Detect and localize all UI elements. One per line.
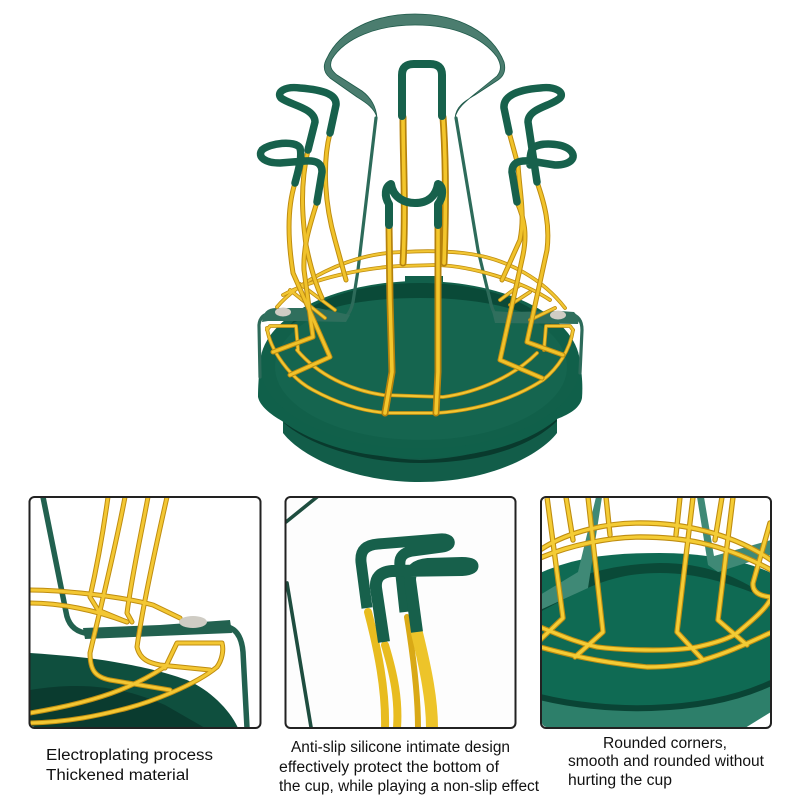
dark frame strip [286,497,317,727]
caption: anti-slip: the cup, while playing a non-slip effect [279,778,540,795]
caption: rounded corners: hurting the cup [568,772,672,789]
caption: rounded corners [568,735,765,789]
product: rotating cup rack [258,14,582,482]
tray base [258,276,582,482]
caption: anti-slip: effectively protect the bottom of [279,759,500,776]
caption: anti-slip: Anti-slip silicone intimate design [291,739,510,756]
panel: anti-slip silicone close-up [286,497,516,728]
panel: rounded corners close-up [540,497,771,728]
green silicone hooks [261,64,573,225]
caption: electroplating [46,747,213,784]
icon: silver screws [275,308,566,320]
caption: electroplating: Electroplating process [46,747,213,764]
caption: rounded corners: Rounded corners, [603,735,727,752]
gold uprights [273,117,563,413]
gold legs close-up [368,612,432,728]
tray close-up [540,553,771,728]
icon: screw close-up [179,616,207,628]
caption: electroplating: Thickened material [46,767,189,784]
tray close-up [30,653,238,728]
strap close-up [540,497,771,610]
gold wires close-up [540,497,771,667]
handle frame and brackets [259,14,582,377]
caption: rounded corners: smooth and rounded without [568,753,765,770]
gold wires close-up [30,497,223,723]
green hooks close-up [361,539,472,642]
gold ring frame [267,251,573,413]
panel: electroplating close-up [30,497,260,728]
strap close-up [43,497,247,728]
caption: anti-slip [279,739,540,795]
